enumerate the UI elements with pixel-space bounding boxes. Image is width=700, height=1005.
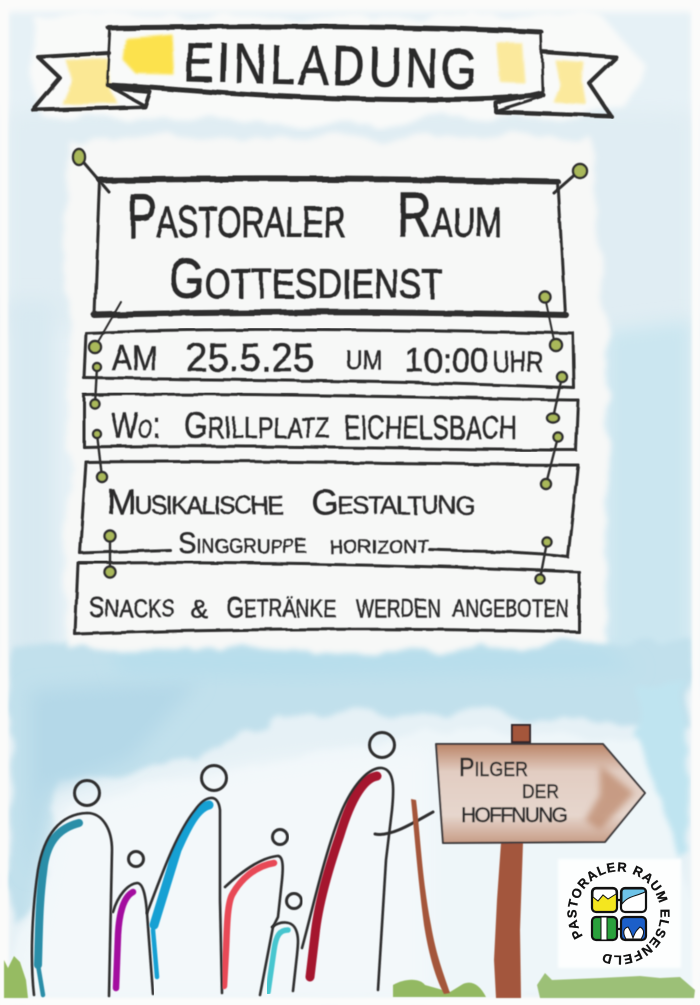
title text: EINLADUNG (183, 30, 481, 101)
arrow sign (436, 744, 645, 843)
figure: person 4 with red stroke (224, 830, 288, 995)
panel: date and time: UM (345, 344, 382, 375)
figure: person 3 with blue stroke (147, 766, 226, 993)
panel: music (80, 461, 578, 560)
panel: music: HORIZONT (329, 537, 429, 557)
panel: snacks (75, 563, 579, 634)
panel: location: GRILLPLATZ (184, 405, 330, 447)
panel: date and time: AM (112, 339, 157, 378)
panel: snacks: & (191, 594, 208, 624)
post (512, 725, 530, 742)
heading line 1: PASTORALER (127, 182, 346, 251)
panel: date and time: 10:00 (405, 342, 489, 380)
panel: snacks: GETRÄNKE (226, 592, 336, 624)
signpost: DER (522, 782, 559, 803)
sign text: PILGER (459, 752, 528, 782)
panel: snacks: ANGEBOTEN (453, 595, 569, 623)
figure: small person with purple stroke (113, 852, 153, 994)
panel: date and time (84, 330, 574, 388)
figure: small person with teal stroke (268, 894, 302, 992)
panel: location: WO: (111, 405, 161, 446)
signpost: HOFFNUNG (461, 804, 568, 827)
panel: location: EICHELSBACH (344, 409, 517, 446)
logo squares (592, 888, 646, 940)
circular logo text: PASTORALER RAUM ELSENFELD (567, 862, 670, 965)
panel: Pastoraler Raum Gottesdienst (94, 179, 566, 315)
logo: Pastoraler Raum Elsenfeld (558, 858, 682, 968)
walking stick (411, 799, 450, 994)
panel: location (84, 394, 578, 450)
grass (4, 956, 695, 998)
panel: snacks: WERDEN (356, 595, 441, 623)
figure: person 1 with teal stroke (32, 780, 112, 996)
ribbon outline (33, 27, 616, 116)
pins connecting the boards (73, 149, 587, 584)
panel: music: SINGGRUPPE (178, 527, 307, 560)
heading line 2: GOTTESDIENST (169, 247, 442, 310)
panel: date and time: 25.5.25 (186, 336, 314, 380)
panel: music: MUSIKALISCHE (107, 483, 284, 522)
panel: music: GESTALTUNG (311, 483, 475, 522)
banner: Einladung (33, 27, 616, 116)
panel: date and time: UHR (493, 346, 543, 379)
signpost (436, 725, 645, 998)
panel: Pastoraler Raum Gottesdienst: RAUM (397, 179, 502, 251)
figure: person 6 with crimson stroke (302, 732, 433, 990)
panel: snacks: SNACKS (89, 592, 175, 624)
yellow watercolour patches (62, 34, 586, 104)
